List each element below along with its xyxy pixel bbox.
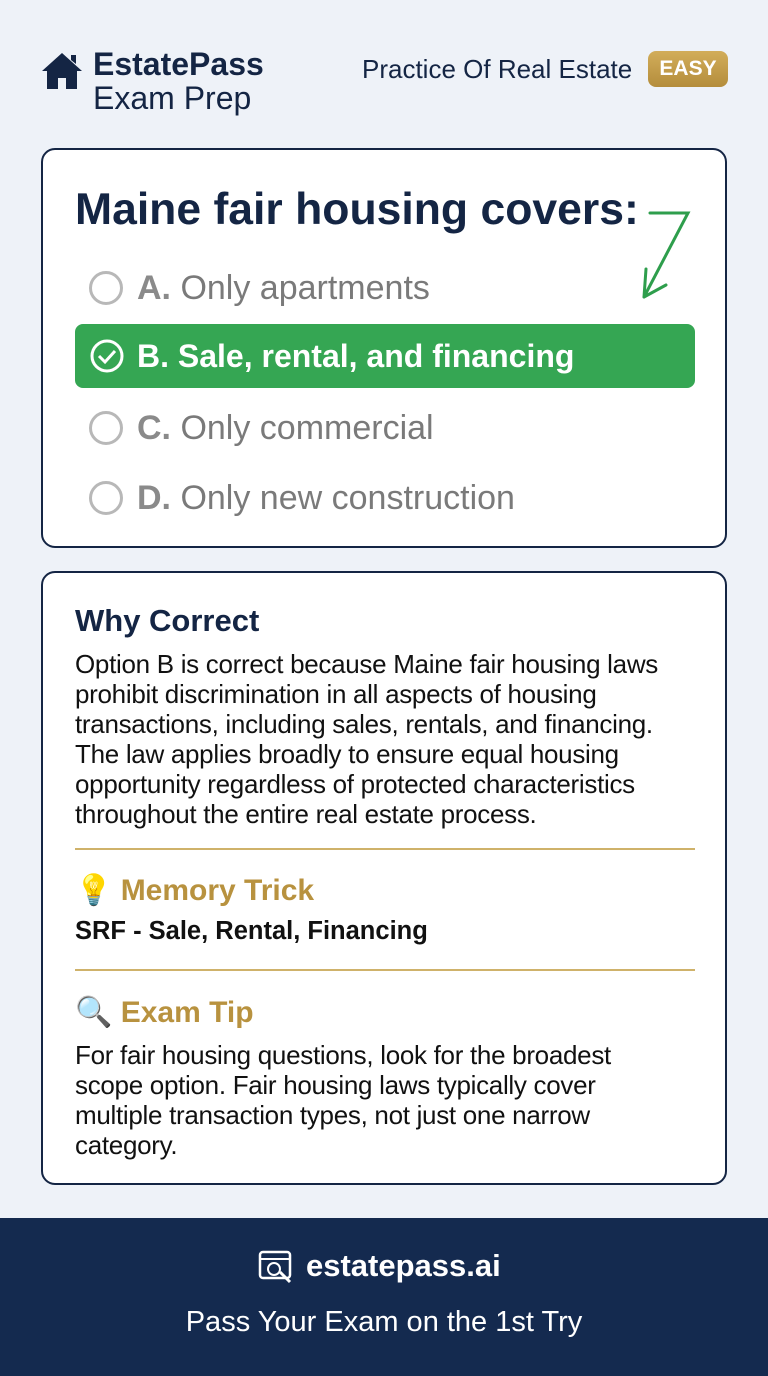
header logo <box>42 46 264 116</box>
text: explanation: Option B is correct because Maine fair housing laws prohibit discrimination in all aspects of housing transactions, including sales, rentals, and financing. The law applies broadly to ensure equal housing opportunity regardless of protected characteristics throughout the entire real estate process. <box>75 649 658 829</box>
badge: easy: EASY <box>659 57 717 80</box>
heading: memory trick: 💡 Memory Trick <box>75 874 314 907</box>
icon: house <box>42 53 82 89</box>
option D: Only new construction <box>180 478 515 516</box>
header logo: EstatePass <box>93 46 264 82</box>
text: memory trick: SRF - Sale, Rental, Financing <box>75 917 428 945</box>
badge: easy <box>648 51 728 87</box>
option A: Only apartments <box>180 268 430 306</box>
header subject and badge: Practice Of Real Estate <box>362 54 632 84</box>
heading: why correct: Why Correct <box>75 603 259 638</box>
header logo: Exam Prep <box>93 80 251 116</box>
icon: browser <box>258 1250 292 1283</box>
panel: explanation <box>41 571 727 1185</box>
option D: D. <box>137 478 171 516</box>
option A: A. <box>137 268 171 306</box>
text: exam tip: For fair housing questions, look for the broadest scope option. Fair housing laws typically cover multiple transaction types, not just one narrow category. <box>75 1040 611 1160</box>
heading: exam tip: 🔍 Exam Tip <box>75 996 254 1029</box>
question title: Maine fair housing covers: <box>75 185 639 234</box>
option B correct: B. Sale, rental, and financing <box>137 338 574 374</box>
option B correct <box>75 324 695 388</box>
arrow: green <box>642 212 690 299</box>
footer <box>0 1218 768 1376</box>
footer tagline: Pass Your Exam on the 1st Try <box>186 1306 582 1338</box>
footer url: estatepass.ai <box>306 1248 501 1283</box>
header subject and badge <box>362 51 728 87</box>
option C: C. <box>137 408 171 446</box>
option C: Only commercial <box>180 408 434 446</box>
panel: question <box>41 148 727 548</box>
